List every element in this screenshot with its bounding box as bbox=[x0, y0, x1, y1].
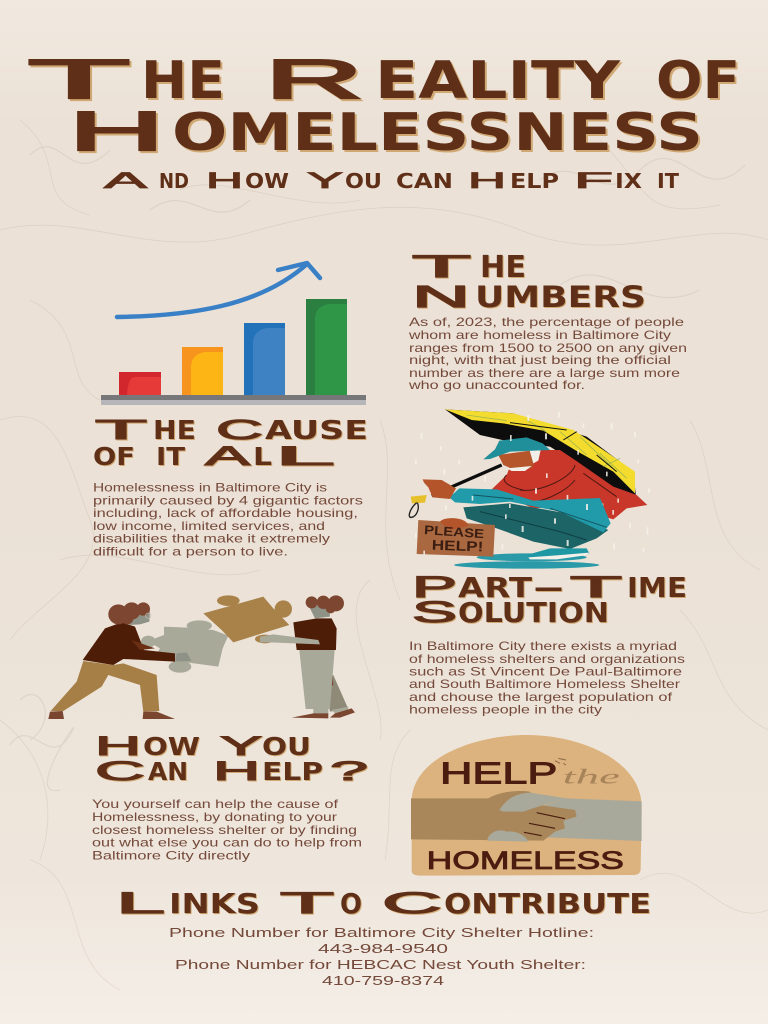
subtitle: ELP bbox=[510, 169, 559, 193]
text: the cause: difficult for a person to live. bbox=[93, 546, 288, 558]
text: the numbers: ranges from 1500 to 2500 on any given bbox=[409, 342, 687, 355]
subtitle: CAN bbox=[396, 169, 453, 193]
heading: part-time solution: IME bbox=[627, 572, 687, 604]
heading: how you can help: OU bbox=[262, 732, 311, 761]
text: the cause: primarily caused by 4 gigantic factors bbox=[93, 494, 363, 508]
hat bbox=[483, 437, 550, 459]
title: OMELESSNESS bbox=[172, 103, 703, 163]
shoe bbox=[527, 548, 589, 559]
heading: links to contribute bbox=[116, 888, 651, 920]
heading: how you can help: C bbox=[95, 756, 145, 786]
text: how you can help: You yourself can help the cause of bbox=[92, 798, 339, 811]
title: OF bbox=[656, 51, 740, 111]
subtitle: ND bbox=[159, 169, 189, 193]
pants bbox=[463, 503, 608, 549]
heading: the numbers: N bbox=[412, 279, 470, 314]
text: how you can help: Baltimore City directly bbox=[92, 850, 250, 862]
title: HE bbox=[141, 51, 225, 111]
heading: the cause of it all: T bbox=[95, 414, 148, 445]
heading: links to contribute: C bbox=[382, 888, 442, 920]
heading: part-time solution: ART bbox=[458, 572, 532, 604]
heading: part-time solution: S bbox=[412, 597, 457, 629]
text: part-time solution: of homeless shelters and organizations bbox=[409, 653, 685, 666]
badge: help the homeless: HELP bbox=[440, 756, 557, 790]
text: phone numbers: Phone Number for Baltimore City Shelter Hotline: bbox=[169, 925, 594, 940]
sign bbox=[417, 518, 495, 557]
text: the numbers: number as there are a large sum more bbox=[409, 367, 680, 380]
heading: links to contribute: ONTRIBUTE bbox=[444, 888, 651, 920]
text: the cause: disabilities that make it extremely bbox=[93, 532, 330, 546]
title: T bbox=[28, 48, 130, 110]
text: the numbers: who go unaccounted for. bbox=[408, 379, 585, 392]
badge: help the homeless bbox=[411, 735, 642, 876]
text: how you can help: Homelessness, by donating to your bbox=[92, 811, 337, 824]
handshake bbox=[411, 791, 642, 842]
heading: part-time solution bbox=[412, 572, 687, 629]
text: the numbers: night, with that just being the official bbox=[409, 354, 671, 367]
subtitle bbox=[104, 168, 679, 193]
heading: part-time solution: — bbox=[534, 572, 563, 604]
subtitle: H bbox=[206, 168, 243, 193]
heading: the numbers: HE bbox=[480, 250, 526, 285]
text: phone numbers: Phone Number for HEBCAC Nest Youth Shelter: bbox=[175, 957, 586, 972]
sign: PLEASE bbox=[424, 523, 485, 541]
text: the cause: low income, limited services, and bbox=[93, 520, 325, 533]
heading: the cause of it all bbox=[93, 414, 368, 471]
text: how you can help: closest homeless shelter or by finding bbox=[92, 824, 357, 837]
heading: the cause of it all: L bbox=[253, 442, 272, 471]
heading: how you can help: AN bbox=[148, 757, 188, 786]
text: how you can help: out what else you can do to help from bbox=[92, 836, 362, 850]
heading: how you can help: ? bbox=[330, 756, 368, 786]
illustration: two people joining puzzle pieces bbox=[48, 595, 355, 719]
text: the numbers: whom are homeless in Baltimore City bbox=[408, 329, 671, 342]
bar chart with rising arrow bbox=[101, 263, 366, 405]
badge: help the homeless: the bbox=[563, 766, 620, 788]
subtitle: Y bbox=[307, 168, 344, 193]
heading: how you can help: Y bbox=[220, 731, 263, 761]
heading: the numbers: UMBERS bbox=[475, 280, 646, 314]
heading: the cause of it all: HE bbox=[153, 416, 196, 446]
heading: part-time solution: T bbox=[570, 572, 623, 604]
hand on handle bbox=[423, 479, 456, 499]
text: part-time solution: and chouse the largest population of bbox=[409, 691, 673, 704]
coat bbox=[492, 450, 647, 519]
sleeve and knee bbox=[449, 488, 611, 532]
heading: links to contribute: INKS bbox=[169, 888, 260, 920]
puzzle piece: grey bbox=[141, 620, 228, 673]
heading: the numbers bbox=[412, 248, 646, 314]
illustration: man under umbrella with sign bbox=[409, 409, 650, 569]
heading: links to contribute: T bbox=[280, 888, 335, 920]
text: the cause: including, lack of affordable housing, bbox=[93, 507, 358, 520]
subtitle: IX bbox=[615, 169, 642, 193]
text: part-time solution: In Baltimore City there exists a myriad bbox=[409, 640, 677, 653]
person: right bbox=[260, 595, 355, 718]
arrow bbox=[117, 263, 320, 317]
heading: the numbers: T bbox=[412, 248, 471, 284]
heading: how you can help: ELP bbox=[262, 757, 323, 786]
title: H bbox=[69, 100, 164, 162]
heading: the cause of it all: C bbox=[216, 414, 263, 445]
text: the numbers: As of, 2023, the percentage of people bbox=[409, 316, 684, 329]
title bbox=[28, 48, 740, 163]
sign: HELP! bbox=[432, 537, 484, 554]
heading: links to contribute: L bbox=[116, 888, 165, 920]
text: phone numbers: 410-759-8374 bbox=[322, 973, 444, 988]
heading: the cause of it all: L bbox=[275, 441, 335, 471]
text: phone numbers: 443-984-9540 bbox=[318, 941, 448, 956]
subtitle: OW bbox=[245, 169, 289, 193]
heading: the cause of it all: AUSE bbox=[265, 416, 368, 446]
subtitle: F bbox=[574, 168, 613, 193]
heading: how you can help bbox=[95, 731, 368, 786]
umbrella bbox=[409, 409, 636, 517]
heading: the cause of it all: A bbox=[205, 441, 251, 471]
heading: how you can help: H bbox=[95, 731, 141, 761]
face and beard bbox=[498, 450, 537, 471]
heading: how you can help: OW bbox=[143, 732, 200, 761]
person: left bbox=[48, 602, 192, 719]
title: R bbox=[265, 48, 363, 110]
puddle bbox=[454, 561, 599, 569]
heading: part-time solution: OLUTION bbox=[458, 597, 609, 629]
text: part-time solution: homeless people in the city bbox=[409, 704, 602, 716]
badge: help the homeless: HOMELESS bbox=[427, 847, 624, 875]
heading: the cause of it all: OF bbox=[93, 442, 135, 471]
heading: part-time solution: P bbox=[412, 572, 457, 604]
rain bbox=[415, 412, 650, 555]
heading: how you can help: H bbox=[213, 756, 260, 786]
subtitle: OU bbox=[345, 169, 382, 193]
subtitle: IT bbox=[657, 169, 679, 193]
text: the cause: Homelessness in Baltimore City is bbox=[93, 482, 327, 494]
subtitle: A bbox=[104, 168, 148, 193]
heading: the cause of it all: IT bbox=[156, 442, 185, 471]
title: EALITY bbox=[375, 51, 622, 111]
heading: links to contribute: O bbox=[340, 888, 362, 920]
text: part-time solution: and South Baltimore Homeless Shelter bbox=[409, 678, 680, 691]
text: part-time solution: such as St Vincent De Paul-Baltimore bbox=[409, 666, 682, 678]
puzzle piece: tan bbox=[203, 595, 292, 643]
subtitle: H bbox=[468, 168, 506, 193]
